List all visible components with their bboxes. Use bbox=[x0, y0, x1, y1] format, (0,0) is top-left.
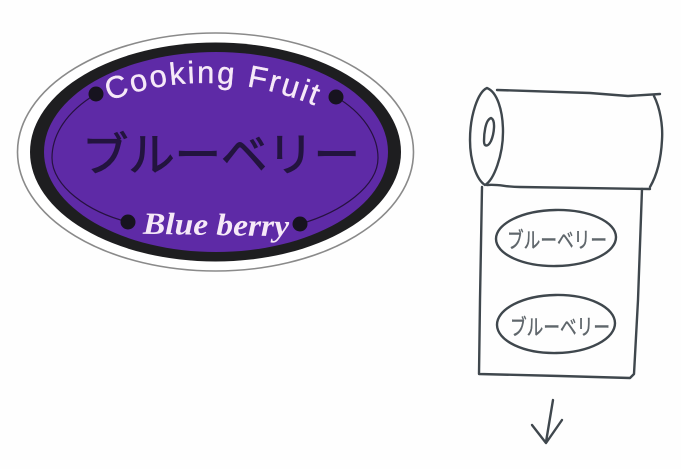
dot bottom right bbox=[292, 216, 308, 232]
roll core hole bbox=[484, 118, 494, 146]
dot bottom left bbox=[120, 214, 136, 230]
panel: hand-drawn label roll bbox=[470, 88, 662, 443]
label outer border bbox=[18, 33, 414, 271]
label purple field bbox=[44, 52, 388, 252]
paper strip bbox=[479, 187, 642, 378]
thin decorative line right bbox=[300, 97, 378, 224]
roll bottom edge bbox=[487, 185, 650, 189]
sticker text one: ブルーベリー bbox=[507, 228, 607, 253]
sticker outline one bbox=[496, 209, 616, 267]
panel: oval label bbox=[16, 32, 414, 272]
heading: Cooking Fruit: Cooking Fruit bbox=[106, 60, 320, 106]
roll top edge bbox=[497, 90, 660, 96]
sticker outline two bbox=[497, 294, 615, 354]
roll right edge bbox=[650, 96, 662, 187]
subtitle: Blue berry: Blue berry bbox=[142, 206, 290, 243]
title: ブルーベリー: ブルーベリー bbox=[82, 129, 360, 181]
roll end circle bbox=[470, 88, 503, 185]
label black ring bbox=[30, 42, 401, 262]
sticker text two: ブルーベリー bbox=[510, 315, 610, 340]
arrow down bbox=[532, 400, 562, 443]
dot top left bbox=[88, 86, 104, 102]
thin decorative line left bbox=[52, 94, 128, 222]
dot top right bbox=[328, 90, 344, 104]
